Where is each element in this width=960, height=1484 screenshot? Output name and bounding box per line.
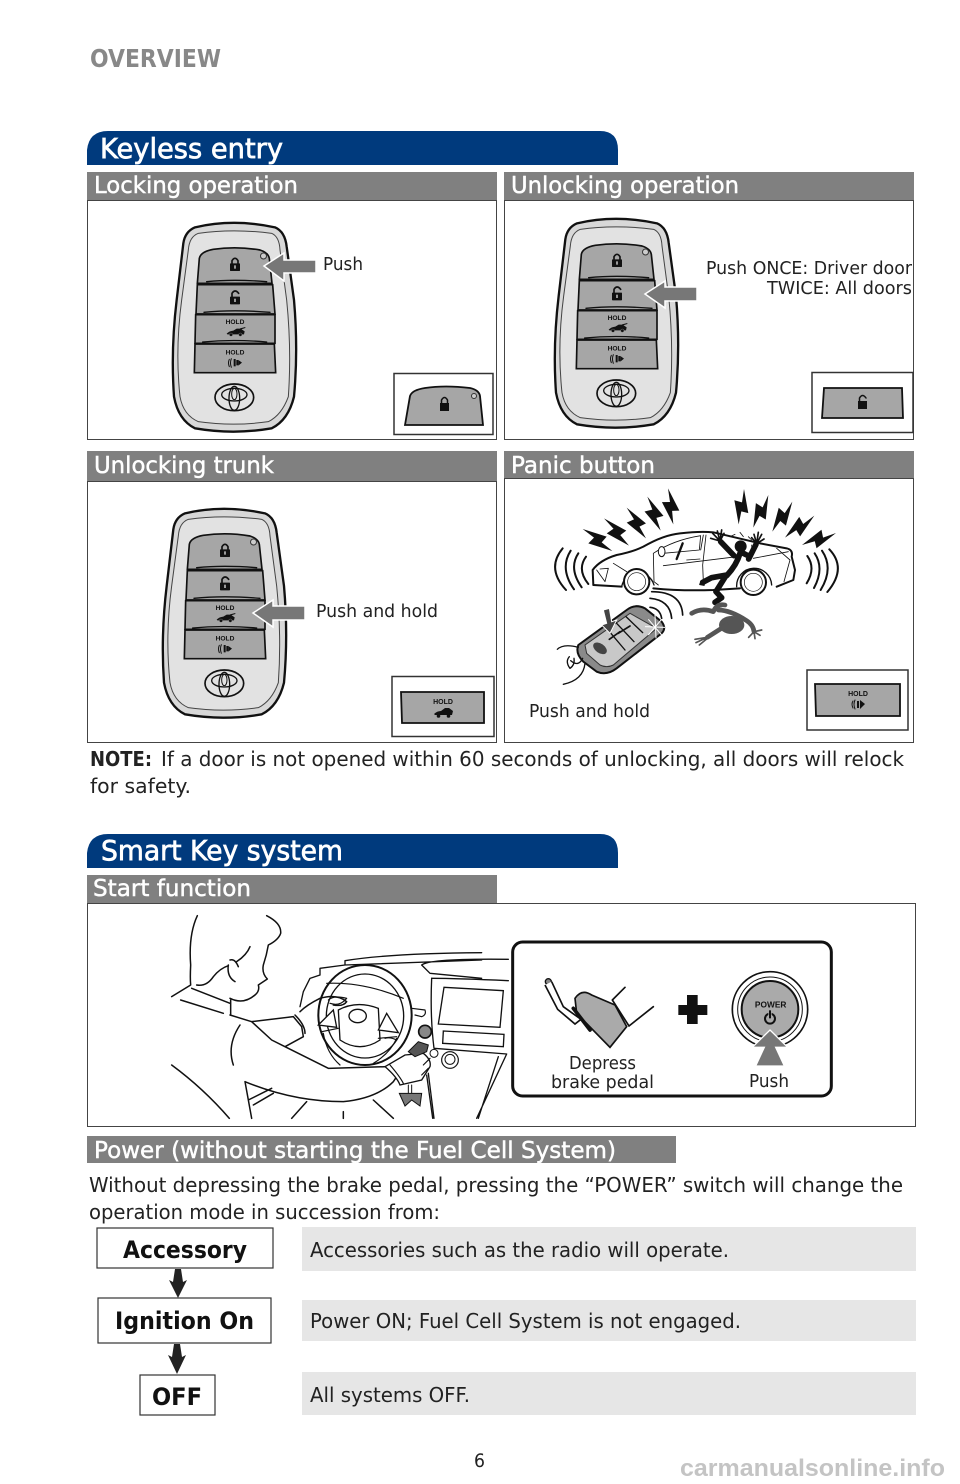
mode: accessory [97,1228,273,1268]
mode: accessory: Accessory [123,1236,247,1264]
key fob: unlocking [555,219,678,428]
figure shadow [692,605,762,645]
panel: locking operation [87,172,497,440]
label: depress brake pedal: Depress [569,1053,636,1074]
mode: ignition on: Ignition On [115,1307,254,1335]
panel: panic button [504,451,914,742]
mode: off [140,1375,215,1415]
mode: ignition on [98,1298,271,1343]
label: push power: Push [749,1071,789,1092]
sound waves [555,548,838,592]
inset: panic button: HOLD [848,691,868,698]
description: ignition on [302,1300,916,1341]
illustration: car alarm scene [555,488,838,684]
inset: trunk button [392,676,494,736]
description: off [302,1372,916,1415]
car with startled person [583,488,836,602]
heading: start function [87,875,497,903]
label: push once or twice: TWICE: All doors [766,278,912,299]
description: off: All systems OFF. [310,1383,470,1407]
heading: unlocking operation: Unlocking operation [511,173,739,199]
label: push: Push [323,254,363,275]
mode: off: OFF [152,1383,202,1411]
section banner: keyless entry: Keyless entry [100,132,283,165]
label: push and hold trunk: Push and hold [316,601,438,622]
illustration: driver at steering wheel [172,916,508,1118]
note: door relock: for safety. [90,774,191,798]
text block: power description: operation mode in succession from: [89,1200,440,1224]
inset: unlock button [812,372,913,432]
heading: panic button: Panic button [511,453,655,479]
note: door relock: NOTE: [90,747,152,771]
arrow: push trunk button [253,600,305,627]
note: door relock: If a door is not opened within 60 seconds of unlocking, all doors will relock [161,747,904,771]
heading: unlocking trunk: Unlocking trunk [94,453,275,479]
key fob: trunk [163,509,286,718]
icon: power button: POWER [755,999,786,1009]
key fob: unlocking: HOLD [608,346,627,353]
label: push once or twice: Push ONCE: Driver door [706,258,913,279]
key fob: locking [173,223,296,432]
remote fob and figure shadow [557,592,762,684]
key fob: locking: HOLD [226,350,245,357]
driver figure [172,916,400,1118]
steering wheel and dashboard [300,953,508,1118]
arrow: push lock button [264,253,316,281]
icon: brake pedal [545,979,653,1047]
inset: panic button [807,670,908,730]
key fob pressed [557,592,683,684]
callout: brake and power switch [513,942,831,1096]
watermark: carmanualsonline.info [680,1455,945,1482]
arrow: push unlock button [645,281,697,308]
note: door relock [90,747,904,798]
icon: plus [678,995,707,1024]
key fob: unlocking: HOLD [608,315,627,322]
panel: unlocking trunk [87,451,497,742]
description: accessory: Accessories such as the radio will operate. [310,1238,729,1262]
startled person [700,530,764,602]
heading: unlocking operation [504,172,914,200]
label: depress brake pedal: brake pedal [551,1072,654,1093]
inset: lock button [394,374,493,434]
heading: power without starting: Power (without starting the Fuel Cell System) [94,1138,616,1164]
section banner: keyless entry [87,131,618,165]
panel: start function [88,904,916,1126]
heading: start function: Start function [93,876,251,902]
description: ignition on: Power ON; Fuel Cell System is not engaged. [310,1309,741,1333]
panel: unlocking operation [504,172,914,440]
heading: unlocking trunk [87,451,497,481]
section banner: smart key system: Smart Key system [101,834,343,867]
description: accessory [302,1227,916,1271]
lightning bolts [583,488,836,551]
icon: power button [732,972,808,1066]
key fob: locking: HOLD [226,319,245,326]
heading: locking operation: Locking operation [94,173,298,199]
key fob: trunk: HOLD [216,605,235,612]
key fob: trunk: HOLD [216,636,235,643]
heading: panic button [504,451,914,479]
arrow: accessory to ignition [169,1269,187,1298]
page number: 6 [474,1450,485,1472]
label: depress brake pedal [551,1053,654,1093]
page heading: overview: OVERVIEW [90,44,221,73]
label: push and hold panic: Push and hold [529,701,650,722]
text block: power description [89,1173,903,1224]
inset: trunk button: HOLD [433,699,453,706]
label: push once or twice [706,258,913,299]
text block: power description: Without depressing the brake pedal, pressing the “POWER” switch will change the [89,1173,903,1197]
section banner: smart key system [87,834,618,868]
arrow: ignition to off [168,1344,186,1374]
car outline [593,532,795,595]
heading: locking operation [87,172,497,200]
